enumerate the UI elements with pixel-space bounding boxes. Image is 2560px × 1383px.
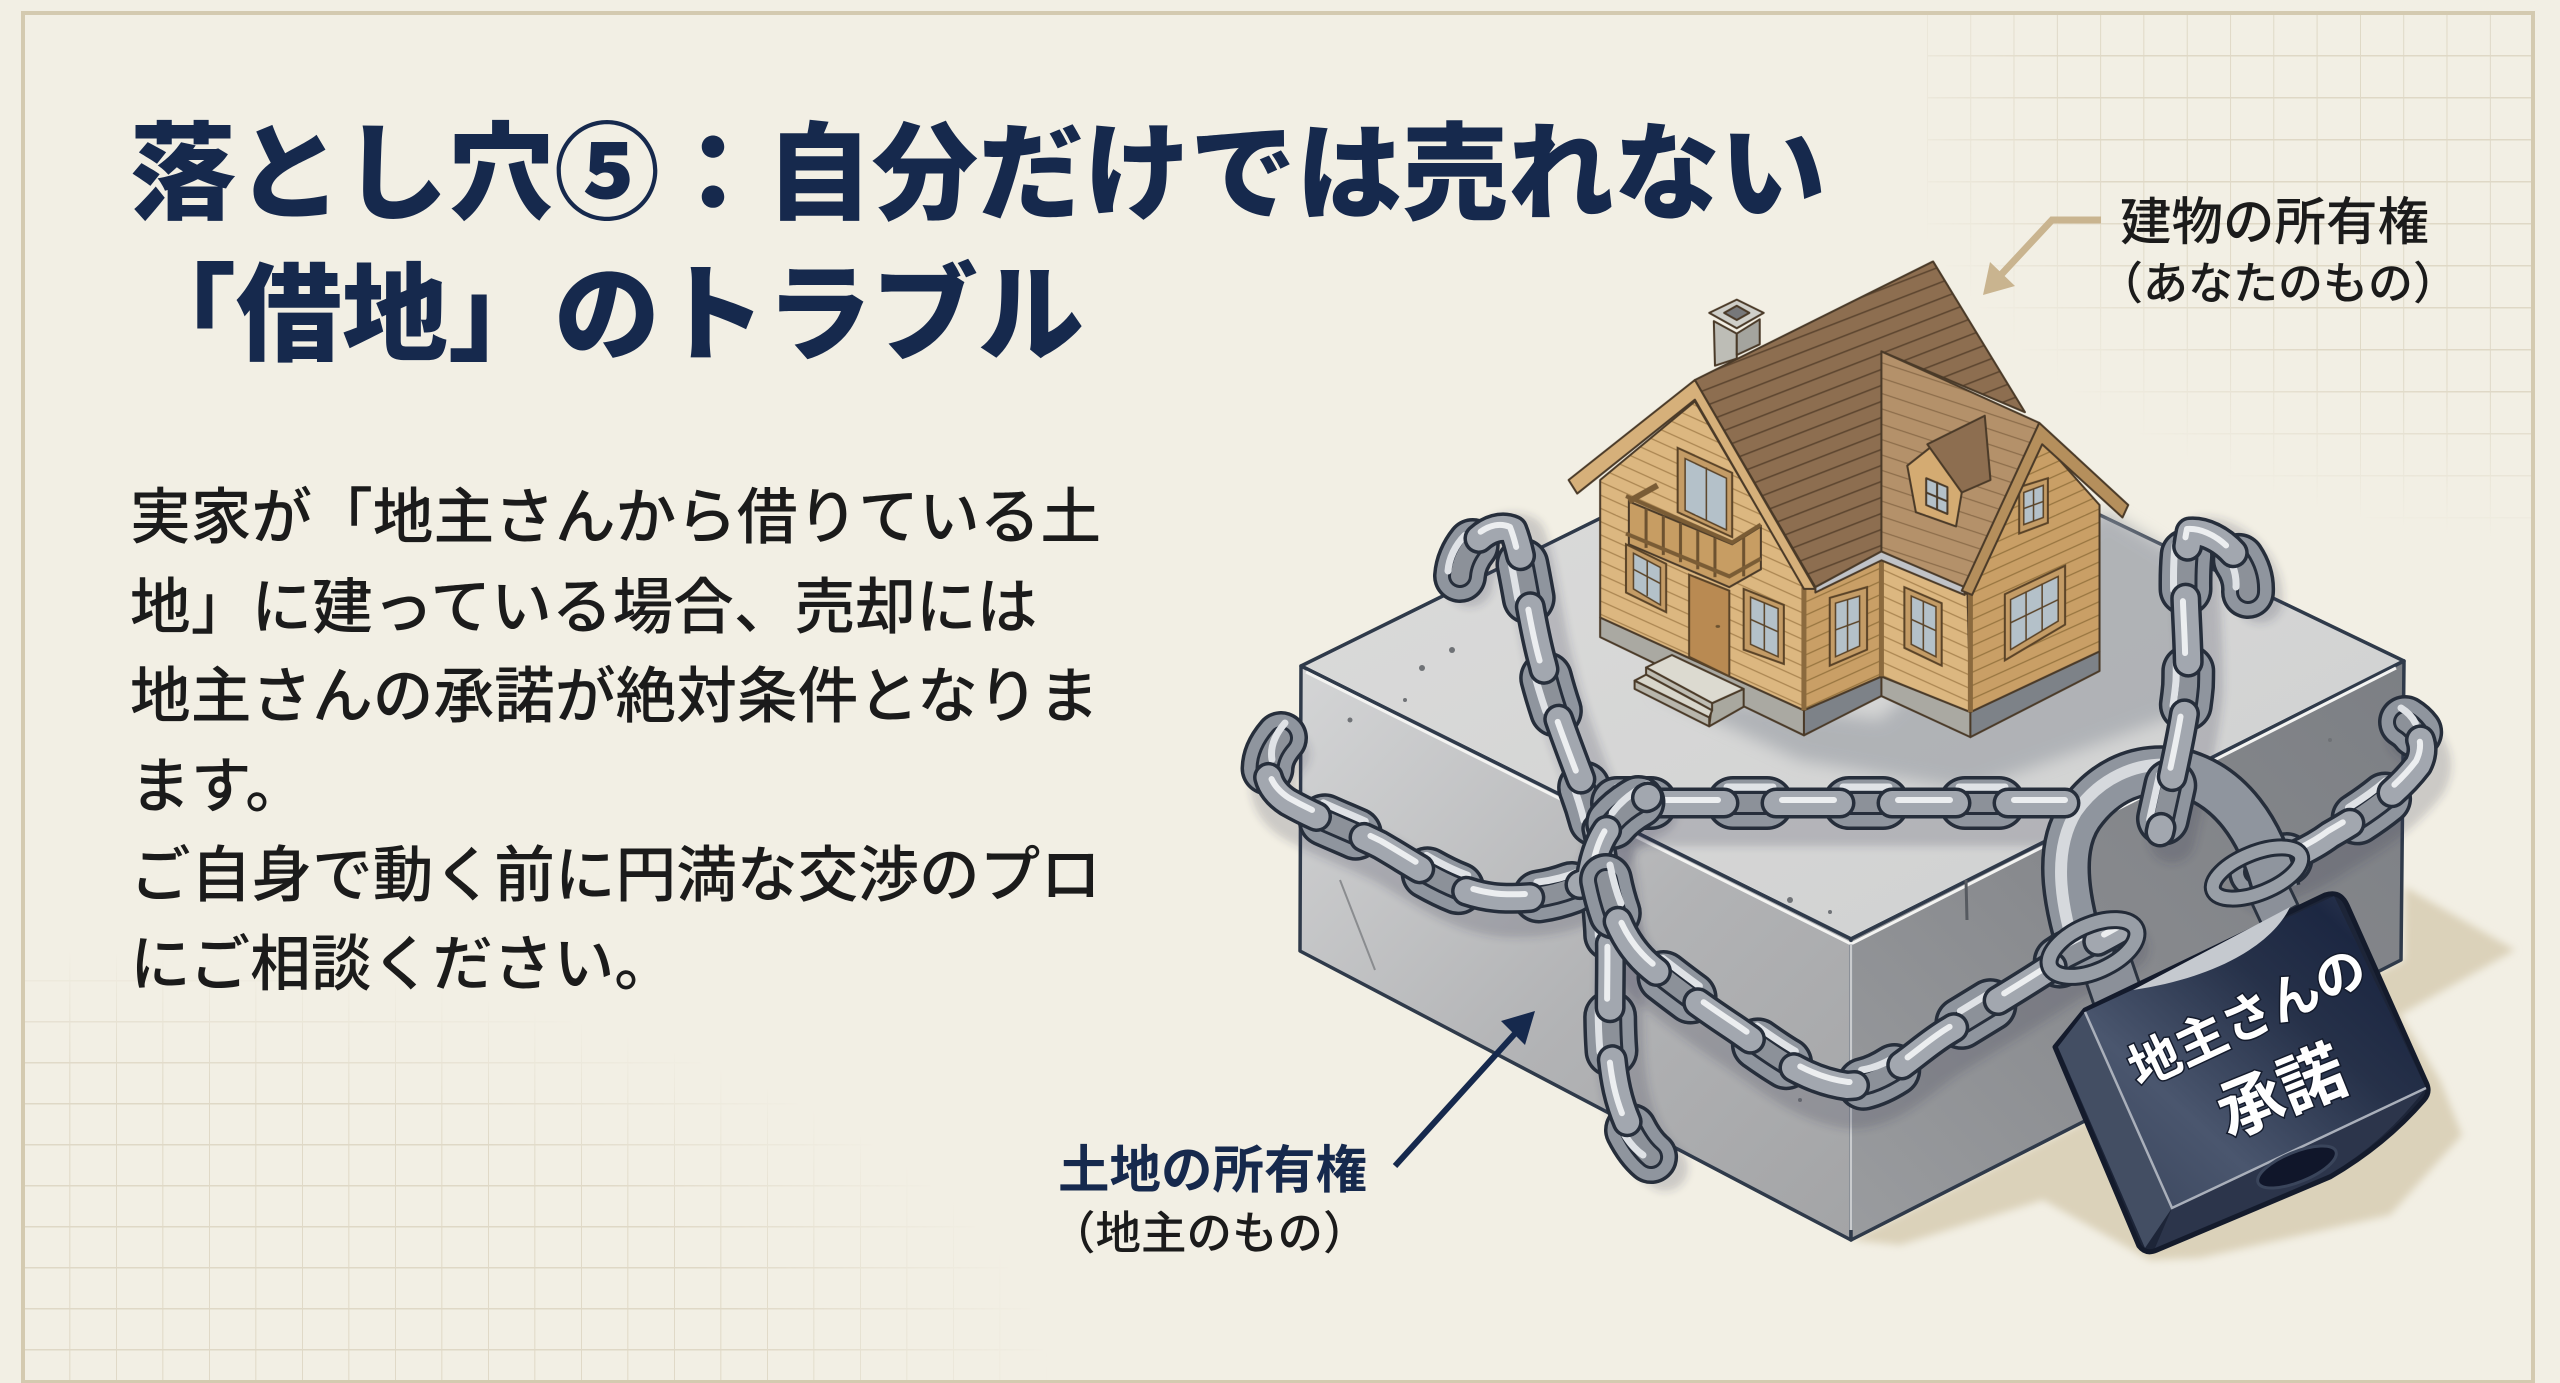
chimney [1709,300,1764,366]
padlock shine [2133,907,2290,990]
gable trim [1569,380,2128,595]
padlock silhouette [2055,894,2428,1252]
block edge highlights and speckles [1306,647,2396,1230]
body text: ご自身で動く前に円満な交渉のプロ [130,841,1101,909]
door [1689,575,1729,676]
illustration: concrete block [1300,395,2404,1240]
padlock edge highlight [2085,1012,2426,1208]
illustration: house [1569,261,2128,737]
label: land ownership: （地主のもの） [1050,1208,1369,1259]
upper window [1678,448,1732,537]
label: land ownership: 土地の所有権 [1058,1141,1367,1199]
chain: right wrap strand [2251,708,2422,872]
padlock label: 承諾 [2206,1033,2356,1151]
house shadow on block [1650,510,2200,790]
chain: right back strand [2148,527,2248,832]
padlock label: 地主さんの [2120,939,2375,1098]
body text: 地主さんの承諾が絶対条件となりま [130,662,1099,730]
shackle rods into lock [2082,878,2298,1008]
title: 落とし穴⑤：自分だけでは売れない [130,116,1826,234]
wall corner trim [1804,559,1970,712]
padlock front face [2085,896,2426,1208]
top-right grid [1927,15,2533,540]
chain: front strand [1606,865,2126,1086]
body text: 地」に建っている場合、売却には [130,573,1037,641]
arrow: building ownership [1983,220,2101,295]
chain: horizontal top strand [1617,787,2065,803]
balcony [1626,485,1761,587]
title [130,116,1826,375]
body text [130,483,1101,998]
bottom-left grid [25,976,967,1380]
padlock shackle [2061,765,2276,965]
main roof [1695,261,2039,595]
house walls [1600,401,2100,712]
chain: back left strand [1448,523,1655,1160]
label: land ownership [1050,1141,1369,1259]
arrow: land ownership [1395,1011,1535,1166]
title: 「借地」のトラブル [130,257,1084,375]
label: building ownership [2098,193,2458,309]
body text: にご相談ください。 [130,930,675,998]
padlock keyhole [2252,1137,2342,1197]
padlock bottom face [2155,1088,2426,1248]
dormer [1907,416,1990,526]
chain: left wrap strand [1268,723,1652,898]
ground-floor windows [1626,478,2065,666]
block top face [1301,395,2404,939]
padlock [2055,894,2428,1252]
body text: 実家が「地主さんから借りている土 [130,483,1101,551]
padlock left face [2058,1012,2172,1248]
block right face [1851,661,2404,1240]
chain shadows [1274,536,2428,1168]
illustration: ground shadow [1851,887,2515,1260]
shackle ring links [2041,837,2308,988]
body text: ます。 [130,752,306,820]
label: building ownership: （あなたのもの） [2098,258,2458,309]
label: building ownership: 建物の所有権 [2120,193,2429,251]
foundation [1600,617,2100,737]
block left face [1300,666,1851,1240]
entrance steps [1635,655,1744,726]
